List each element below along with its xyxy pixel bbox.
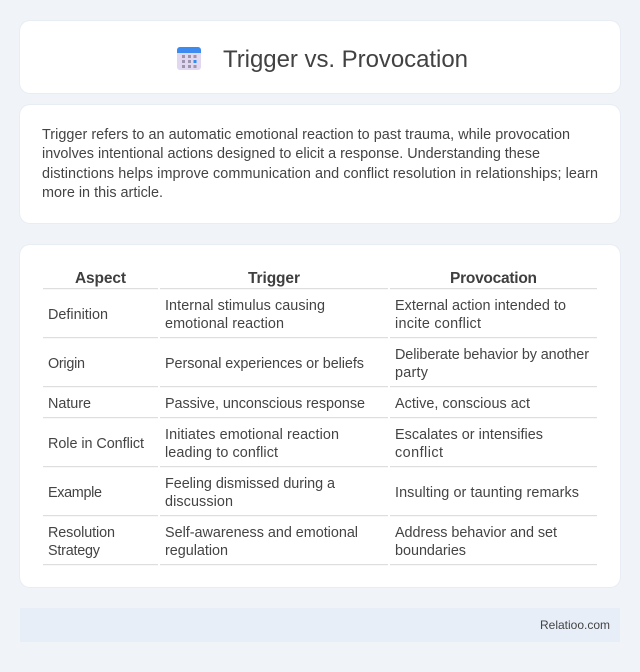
icon: calendar (177, 47, 201, 70)
row: nature: Nature (48, 396, 91, 412)
row: origin: Personal experiences or beliefs (165, 356, 364, 372)
row: definition: External action intended to (395, 298, 566, 314)
table header: Trigger (248, 270, 300, 287)
row: nature (48, 396, 530, 412)
row: resolution strategy: Self-awareness and emotional (165, 525, 358, 541)
row: nature: Active, conscious act (395, 396, 530, 412)
row: example: Feeling dismissed during a (165, 476, 335, 492)
row: example (48, 476, 579, 510)
row: definition: emotional reaction (165, 316, 284, 332)
intro text: Trigger refers to an automatic emotional reaction to past trauma, while provocation (42, 127, 570, 143)
row: role in conflict: Initiates emotional reaction (165, 427, 339, 443)
row: origin (48, 347, 589, 381)
title: Trigger vs. Provocation (223, 46, 468, 73)
row: role in conflict: conflict (395, 445, 443, 461)
row: resolution strategy: Resolution (48, 525, 115, 541)
row: example: Insulting or taunting remarks (395, 485, 579, 501)
row: origin: Origin (48, 356, 85, 372)
row: resolution strategy (48, 525, 557, 559)
table header (75, 270, 537, 287)
intro text: distinctions helps improve communication and conflict resolution in relationships; learn (42, 166, 598, 182)
row: example: Example (48, 485, 102, 501)
row: origin: Deliberate behavior by another (395, 347, 589, 363)
panel: title card (20, 21, 620, 93)
row: role in conflict: leading to conflict (165, 445, 278, 461)
row: example: discussion (165, 494, 233, 510)
intro text (42, 127, 598, 201)
table header: Aspect (75, 270, 126, 287)
row: definition (48, 298, 566, 332)
row: role in conflict: Role in Conflict (48, 436, 144, 452)
row: role in conflict (48, 427, 543, 461)
footer credit: Relatioo.com (540, 618, 610, 632)
panel: comparison table card (20, 245, 620, 587)
row: resolution strategy: boundaries (395, 543, 466, 559)
intro text: involves intentional actions designed to elicit a response. Understanding these (42, 146, 540, 162)
row: definition: incite conflict (395, 316, 481, 332)
panel: intro card (20, 105, 620, 223)
row: resolution strategy: Strategy (48, 543, 101, 559)
panel: footer bar (20, 608, 620, 642)
row: resolution strategy: Address behavior and set (395, 525, 557, 541)
row: definition: Definition (48, 307, 108, 323)
row: nature: Passive, unconscious response (165, 396, 365, 412)
intro text: more in this article. (42, 185, 163, 201)
row: origin: party (395, 365, 429, 381)
row: definition: Internal stimulus causing (165, 298, 325, 314)
row: role in conflict: Escalates or intensifies (395, 427, 543, 443)
row: resolution strategy: regulation (165, 543, 228, 559)
table header: Provocation (450, 270, 537, 287)
